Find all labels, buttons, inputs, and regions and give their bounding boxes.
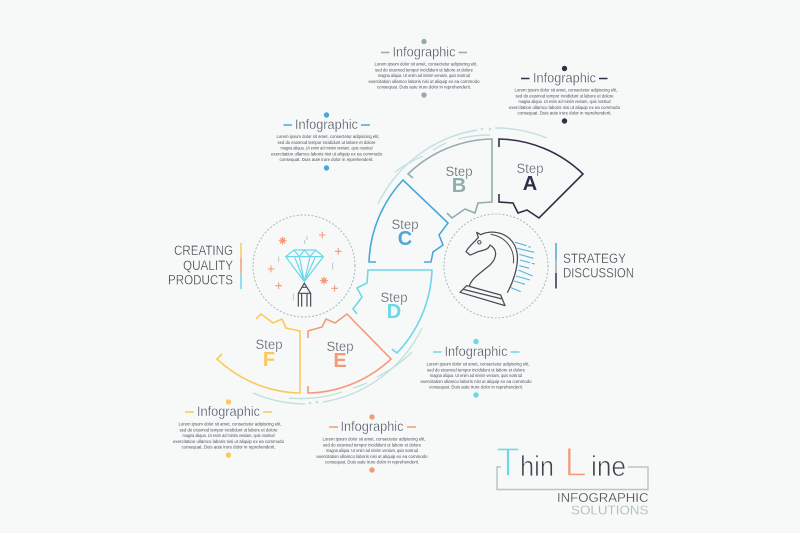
text: Infographic D (420, 339, 532, 398)
segment: Step F (217, 314, 300, 393)
icon: diamond and pencil in dotted circle (253, 215, 355, 317)
side label: strategy discussion: STRATEGY (563, 251, 626, 266)
text: Infographic A: exercitation ullamco laboris nisi ut aliquip ex ea commodo (509, 105, 621, 110)
segment: Step B: B (452, 175, 466, 197)
text: Infographic B: sed do eiusmod tempor incididunt ut labore et dolore (375, 67, 474, 72)
text: Infographic D: Infographic (444, 343, 508, 359)
side label: strategy discussion: DISCUSSION (563, 266, 634, 280)
text: Infographic A: consequat. Duis aute irure dolor in reprehenderit. (518, 111, 612, 116)
text: Infographic B: magna aliqua. Ut enim ad minim veniam, quis nostrud (378, 73, 470, 78)
segment: Step F: Step (256, 337, 282, 352)
text: Infographic B (368, 39, 480, 98)
logo: Thin Line Infographic Solutions: hin (520, 451, 554, 483)
text: Infographic F (173, 399, 285, 458)
segment: Step C: C (398, 228, 412, 250)
text: Infographic C: Lorem ipsum dolor sit amet, consectetur adipiscing elit, (276, 134, 380, 139)
text: Infographic E: exercitation ullamco laboris nisi ut aliquip ex ea commodo (316, 454, 428, 459)
text: Infographic B: Lorem ipsum dolor sit amet, consectetur adipiscing elit, (374, 62, 478, 66)
text: Infographic D: magna aliqua. Ut enim ad minim veniam, quis nostrud (430, 373, 522, 378)
segment: Step D (353, 270, 432, 353)
text: Infographic C: magna aliqua. Ut enim ad minim veniam, quis nostrud (280, 146, 373, 150)
side label: creating quality products: PRODUCTS (168, 272, 233, 288)
text: Infographic B: exercitation ullamco laboris nisi ut aliquip ex ea commodo (368, 79, 480, 84)
text: Infographic A (509, 66, 621, 124)
segment: Step B: Step (446, 164, 472, 179)
text: Infographic E: Infographic (340, 418, 404, 434)
segment: Step A (499, 139, 583, 218)
text: Infographic A: Infographic (533, 70, 596, 86)
segment: Step D: Step (380, 290, 408, 305)
segment: Step E: Step (326, 339, 354, 354)
lower decorative arc band (253, 328, 422, 404)
segment: Step C: Step (392, 217, 418, 232)
text: Infographic C (271, 112, 383, 171)
text: Infographic F: consequat. Duis aute irure dolor in reprehenderit. (182, 445, 276, 450)
segment: Step E (308, 314, 391, 393)
text: Infographic D: Lorem ipsum dolor sit amet, consectetur adipiscing elit, (426, 362, 530, 366)
text: Infographic E: magna aliqua. Ut enim ad minim veniam, quis nostrud (326, 448, 418, 453)
logo: Thin Line Infographic Solutions: T (496, 439, 520, 485)
text: Infographic A: sed do eiusmod tempor incididunt ut labore et dolore (516, 93, 614, 98)
text: Infographic F: sed do eiusmod tempor incididunt ut labore et dolore (180, 427, 278, 432)
segment: Step F: F (263, 349, 275, 371)
icon: chess knight in dotted circle (444, 214, 548, 318)
text: Infographic F: magna aliqua. Ut enim ad minim veniam, quis nostrud (182, 433, 275, 438)
text: Infographic C: consequat. Duis aute irure dolor in reprehenderit. (280, 157, 374, 162)
logo: Thin Line Infographic Solutions (496, 439, 649, 518)
text: Infographic C: exercitation ullamco laboris nisi ut aliquip ex ea commodo (271, 152, 383, 156)
upper decorative arc band (378, 128, 547, 204)
text: Infographic F: exercitation ullamco laboris nisi ut aliquip ex ea commodo (173, 439, 285, 444)
side label: creating quality products: QUALITY (183, 258, 233, 273)
text: Infographic F: Lorem ipsum dolor sit amet, consectetur adipiscing elit, (178, 422, 282, 426)
text: Infographic A: magna aliqua. Ut enim ad minim veniam, quis nostrud (518, 99, 611, 104)
text: Infographic F: Infographic (197, 403, 260, 419)
side label: creating quality products (168, 243, 241, 289)
side label: creating quality products: CREATING (174, 243, 233, 258)
segment: Step E: E (333, 350, 347, 372)
text: Infographic E: consequat. Duis aute irure dolor in reprehenderit. (325, 460, 419, 465)
text: Infographic A: Lorem ipsum dolor sit amet, consectetur adipiscing elit, (514, 88, 618, 92)
segment: Step B (408, 139, 492, 218)
segment: Step A: Step (516, 161, 544, 176)
logo: Thin Line Infographic Solutions: INFOGRAPHIC (557, 490, 648, 505)
text: Infographic C: sed do eiusmod tempor incididunt ut labore et dolore (278, 140, 376, 145)
text: Infographic B: Infographic (392, 44, 456, 60)
text: Infographic E: Lorem ipsum dolor sit amet, consectetur adipiscing elit, (322, 436, 426, 442)
text: Infographic C: Infographic (295, 116, 358, 132)
logo: Thin Line Infographic Solutions: L (564, 439, 587, 485)
logo: Thin Line Infographic Solutions: SOLUTIONS (571, 502, 649, 518)
segment: Step A: A (523, 173, 537, 195)
text: Infographic D: sed do eiusmod tempor incididunt ut labore et dolore (427, 367, 526, 372)
text: Infographic D: exercitation ullamco laboris nisi ut aliquip ex ea commodo (420, 379, 532, 384)
segment: Step C (369, 180, 448, 262)
text: Infographic E (316, 414, 428, 473)
text: Infographic E: sed do eiusmod tempor incididunt ut labore et dolore (323, 442, 422, 447)
segment: Step D: D (387, 301, 401, 323)
text: Infographic D: consequat. Duis aute irure dolor in reprehenderit. (429, 385, 523, 390)
text: Infographic B: consequat. Duis aute irure dolor in reprehenderit. (377, 85, 471, 90)
logo: Thin Line Infographic Solutions: ine (591, 451, 626, 483)
side label: strategy discussion (556, 243, 634, 288)
